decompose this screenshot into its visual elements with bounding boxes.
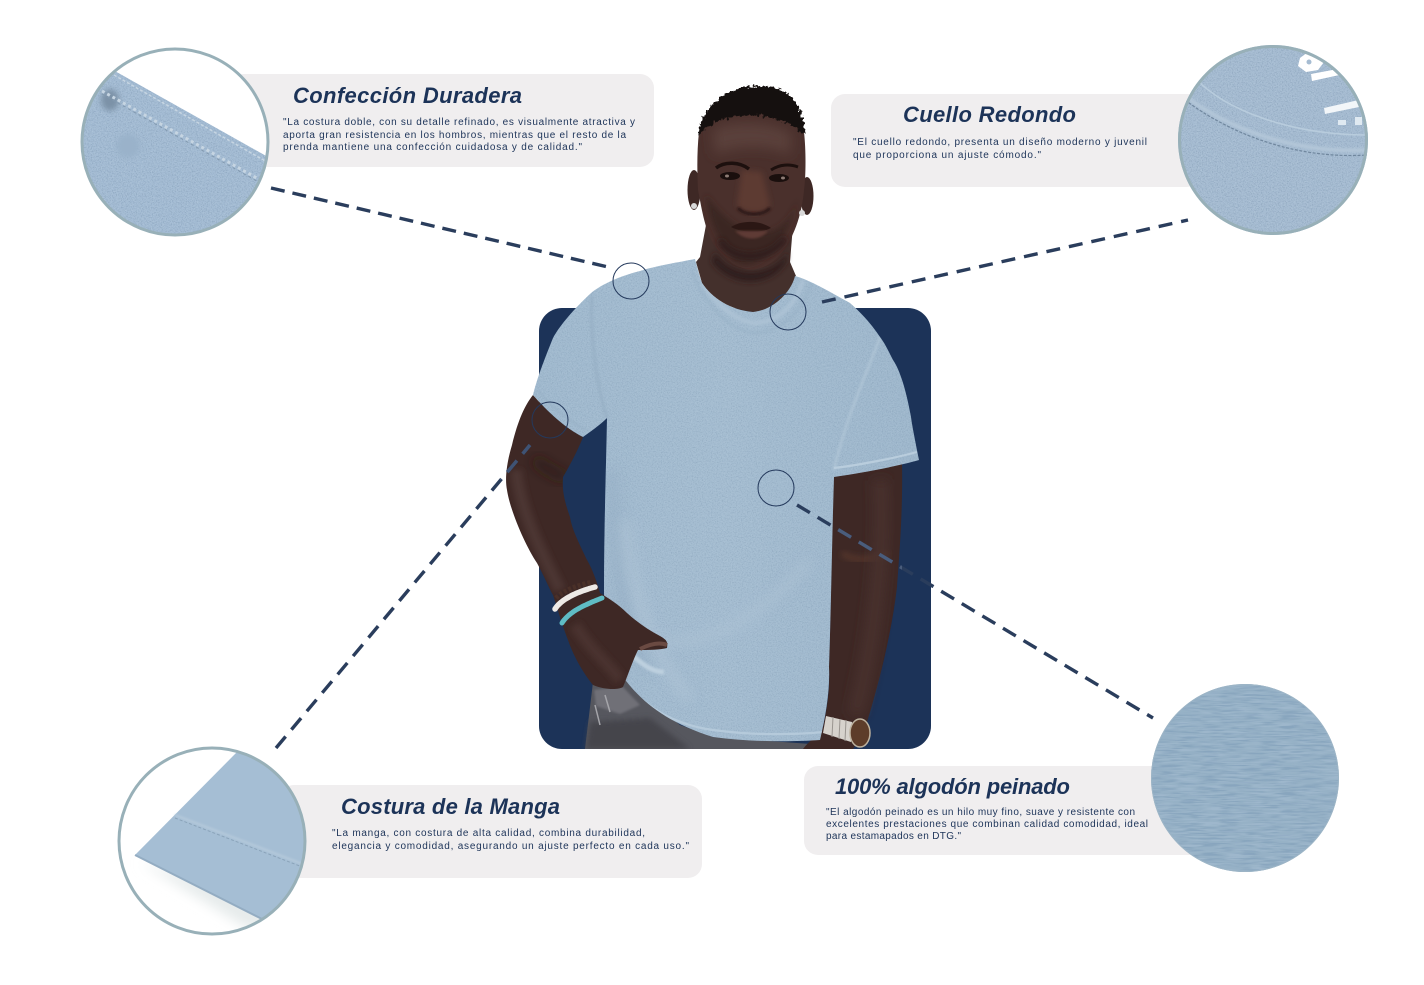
description: elegancia y comodidad, asegurando un ajuste perfecto en cada uso." (332, 841, 689, 852)
description: "La manga, con costura de alta calidad, combina durabilidad, (332, 828, 645, 839)
jeans (585, 680, 825, 749)
photo: model wearing t-shirt (506, 86, 925, 749)
description (283, 117, 635, 153)
description: que proporciona un ajuste cómodo." (853, 150, 1041, 161)
right arm (803, 464, 902, 749)
description (332, 828, 689, 852)
mouth (731, 222, 771, 232)
eyebrows (716, 163, 749, 169)
bracelets (555, 582, 602, 623)
neck (696, 225, 796, 312)
face (697, 108, 806, 270)
icon: shoulder seam detail (80, 40, 275, 237)
panel: navy backdrop (539, 308, 931, 749)
heading: Confección Duradera (293, 83, 522, 108)
left hand (553, 593, 667, 689)
earrings (691, 203, 697, 209)
dashed line: shoulder seam (271, 188, 608, 267)
heading: Cuello Redondo (903, 102, 1076, 127)
heading: 100% algodón peinado (835, 774, 1070, 799)
description: excelentes prestaciones que combinan calidad comodidad, ideal (826, 819, 1148, 830)
panel: 100% algodón peinado (804, 766, 1204, 855)
t-shirt (530, 255, 925, 745)
heading: Costura de la Manga (341, 794, 560, 819)
dashed line: sleeve (276, 445, 530, 748)
dashed line: collar (822, 220, 1188, 302)
panel: Cuello Redondo (831, 94, 1201, 187)
description: "El algodón peinado es un hilo muy fino, suave y resistente con (826, 807, 1135, 818)
panel: Confección Duradera (230, 74, 654, 167)
marker: collar (770, 294, 806, 330)
nose (738, 208, 770, 214)
description: prenda mantiene una confección cuidadosa y de calidad." (283, 142, 582, 153)
panel: Costura de la Manga (280, 785, 702, 878)
dashed line: fabric (797, 505, 1153, 718)
description: para estamapados en DTG." (826, 831, 961, 842)
watch (823, 716, 870, 747)
ears (688, 170, 700, 210)
description: "El cuello redondo, presenta un diseño moderno y juvenil (853, 137, 1147, 148)
icon: sleeve detail (117, 746, 310, 936)
description (853, 137, 1147, 161)
marker: sleeve (532, 402, 568, 438)
description: aporta gran resistencia en los hombros, mientras que el resto de la (283, 130, 626, 141)
marker: shoulder (613, 263, 649, 299)
description: "La costura doble, con su detalle refinado, es visualmente atractiva y (283, 117, 635, 128)
left arm (506, 395, 600, 595)
icon: collar detail (1177, 44, 1369, 236)
hair (699, 86, 805, 136)
head (688, 86, 814, 270)
description (826, 807, 1148, 842)
eyes (720, 172, 740, 180)
marker: fabric (758, 470, 794, 506)
icon: fabric detail (1150, 683, 1340, 873)
